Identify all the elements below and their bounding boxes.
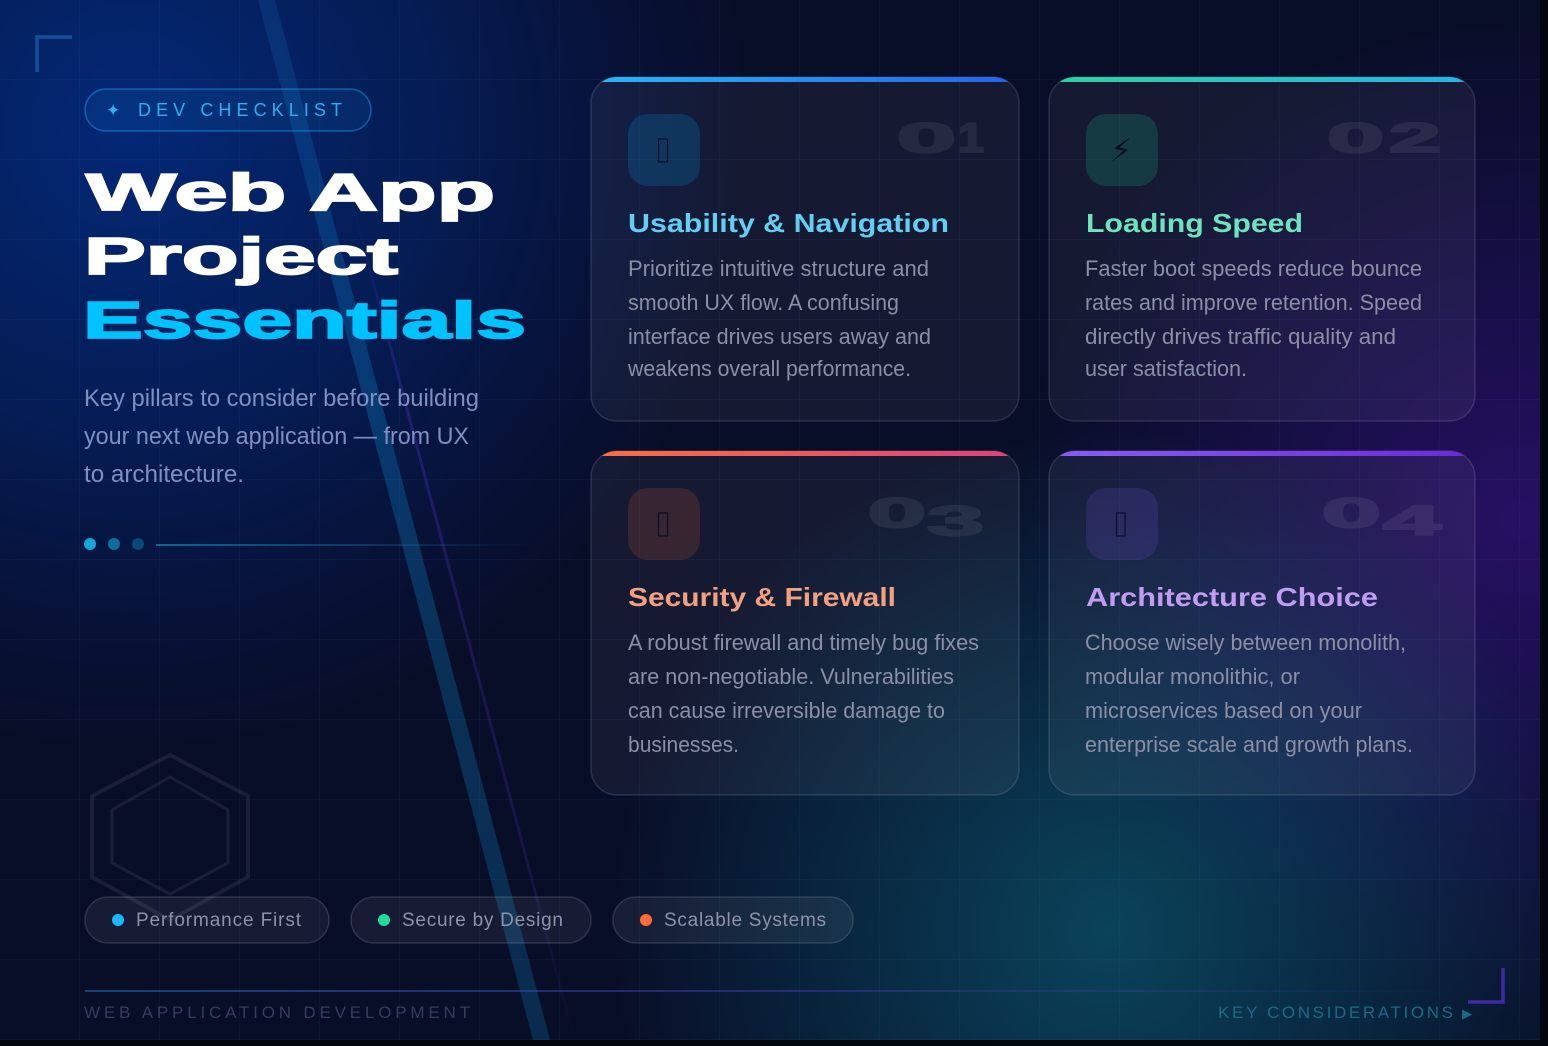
tag: secure by design: Secure by Design (402, 910, 563, 931)
tag: scalable systems: Scalable Systems (664, 910, 826, 931)
panel: security and firewall (591, 451, 1019, 795)
body text: enterprise scale and growth plans. (1085, 732, 1413, 757)
thin purple diagonal line (350, 200, 576, 1040)
icon: hexagon outline (92, 755, 248, 920)
heading: Loading Speed (1086, 208, 1303, 238)
number 04: 4 (1383, 497, 1443, 544)
body text: interface drives users away and (628, 324, 931, 349)
accent bar (591, 77, 1019, 82)
icon: missing glyph box (1086, 488, 1158, 560)
tag: secure by design (351, 897, 591, 943)
body text: directly drives traffic quality and (1085, 324, 1396, 349)
icon: missing glyph box (628, 114, 700, 186)
body text (1085, 256, 1422, 381)
title (83, 164, 526, 350)
title: Project (84, 228, 398, 286)
number 04 (1322, 489, 1443, 544)
subtitle: your next web application — from UX (84, 423, 469, 450)
body text: are non-negotiable. Vulnerabilities (628, 664, 954, 689)
title: Web App (86, 164, 495, 222)
panel: architecture choice (1049, 451, 1475, 795)
heading: Security & Firewall (628, 582, 896, 612)
panel: loading speed (1049, 77, 1475, 421)
number 03 (868, 489, 984, 544)
body text: microservices based on your (1085, 698, 1362, 723)
footer right label: KEY CONSIDERATIONS (1218, 1003, 1453, 1022)
subtitle (84, 385, 479, 488)
diagonal light beam (258, 0, 550, 1040)
icon: missing glyph box (628, 488, 700, 560)
tag: performance first (85, 897, 329, 943)
corner bracket bottom-right (1468, 968, 1503, 1002)
footer right label: ▶ (1462, 1007, 1472, 1022)
body text: rates and improve retention. Speed (1085, 290, 1422, 315)
accent bar (591, 451, 1019, 456)
body text: businesses. (628, 732, 739, 757)
icon: lightning (1086, 114, 1158, 186)
tag: performance first: Performance First (136, 910, 302, 931)
body text: can cause irreversible damage to (628, 698, 945, 723)
number 03: 0 (868, 489, 926, 536)
accent bar (1049, 77, 1475, 82)
footer left label: WEB APPLICATION DEVELOPMENT (84, 1003, 470, 1022)
body text (628, 630, 979, 757)
subtitle: to architecture. (84, 461, 244, 488)
body text: A robust firewall and timely bug fixes (628, 630, 979, 655)
number 02 (1327, 114, 1441, 161)
number 01 (897, 114, 984, 161)
badge: dev checklist (85, 89, 371, 131)
body text: smooth UX flow. A confusing (628, 290, 899, 315)
tag: scalable systems (613, 897, 853, 943)
progress dots and line (84, 538, 530, 550)
body text: user satisfaction. (1085, 356, 1247, 381)
heading: Architecture Choice (1086, 582, 1378, 612)
footer rule (85, 990, 1475, 992)
number 03: 3 (927, 497, 984, 544)
body text: weakens overall performance. (627, 356, 911, 381)
number 02: 2 (1389, 114, 1441, 161)
body text: Prioritize intuitive structure and (628, 256, 929, 281)
heading: Usability & Navigation (628, 208, 949, 238)
body text: Choose wisely between monolith, (1085, 630, 1406, 655)
accent bar (1049, 451, 1475, 456)
subtitle: Key pillars to consider before building (84, 385, 479, 412)
icon: lightning: ⚡ (1110, 133, 1132, 169)
title: Essentials (83, 292, 526, 350)
badge: dev checklist: ✦ (106, 101, 120, 121)
number 01: 0 (897, 114, 956, 161)
number 01: 1 (958, 114, 984, 161)
body text: modular monolithic, or (1085, 664, 1300, 689)
corner bracket top-left (37, 37, 72, 72)
panel: usability and navigation (591, 77, 1019, 421)
body text (627, 256, 931, 381)
body text (1085, 630, 1413, 757)
badge: dev checklist: DEV CHECKLIST (138, 100, 342, 120)
number 02: 0 (1327, 114, 1384, 161)
number 04: 0 (1322, 489, 1381, 536)
body text: Faster boot speeds reduce bounce (1085, 256, 1422, 281)
